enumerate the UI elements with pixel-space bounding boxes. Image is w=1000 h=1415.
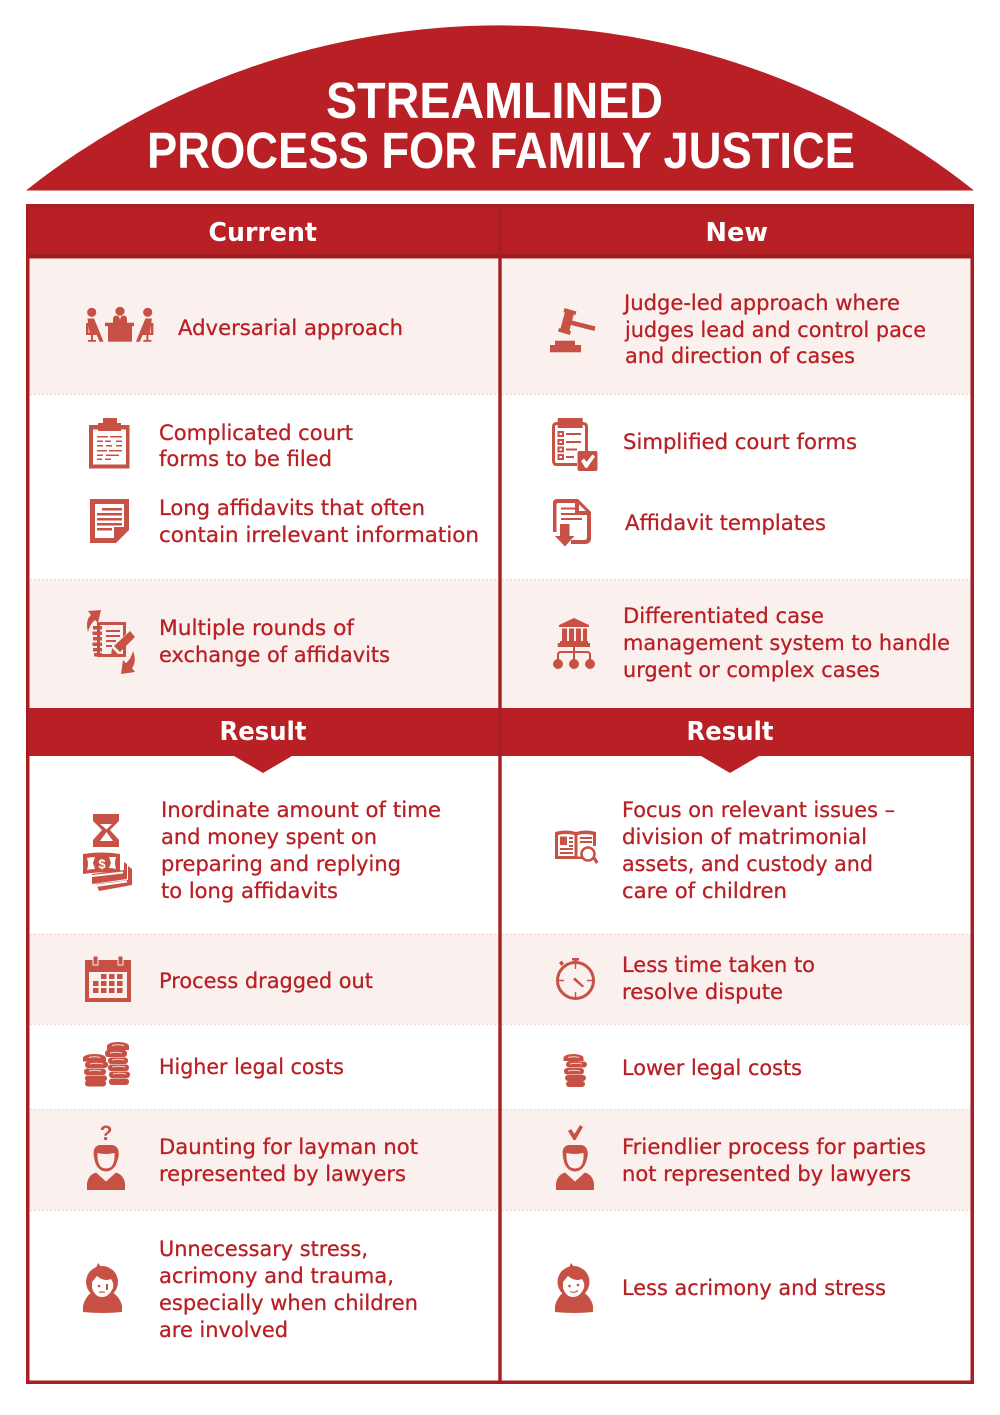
text — [161, 798, 441, 904]
left result: time and money — [83, 798, 441, 904]
text: Process dragged out — [159, 969, 373, 994]
text: preparing and replying — [161, 852, 401, 877]
right column: simplified forms — [552, 418, 857, 471]
icon: coin stack — [564, 1054, 587, 1087]
text — [159, 496, 479, 548]
text: resolve dispute — [622, 980, 783, 1005]
text: are involved — [159, 1318, 288, 1343]
icon: person with question mark: ? — [100, 1122, 112, 1145]
text: Less time taken to — [622, 953, 815, 978]
text: Friendlier process for parties — [622, 1135, 926, 1160]
text: Long affidavits that often — [159, 496, 425, 521]
text — [622, 291, 926, 369]
title: STREAMLINED — [326, 72, 663, 129]
icon: stopwatch — [558, 958, 594, 998]
text: Less acrimony and stress — [622, 1276, 886, 1301]
text: to long affidavits — [161, 879, 338, 904]
icon: court parties — [86, 307, 153, 342]
text — [622, 953, 815, 1005]
text: and direction of cases — [625, 344, 855, 369]
text: Complicated court — [159, 421, 353, 446]
text: Unnecessary stress, — [159, 1237, 368, 1262]
title — [147, 72, 855, 179]
text: and money spent on — [161, 825, 377, 850]
result band: left: Result — [220, 717, 306, 747]
icon: person with tick — [556, 1125, 594, 1190]
text — [159, 616, 390, 668]
text — [159, 1237, 418, 1343]
text — [622, 1135, 926, 1187]
right column: judge-led approach — [550, 291, 926, 369]
text: urgent or complex cases — [623, 658, 880, 683]
text: care of children — [622, 879, 787, 904]
text: Differentiated case — [623, 604, 824, 629]
text — [159, 421, 353, 472]
title banner — [26, 25, 974, 190]
right result: less time — [558, 953, 815, 1005]
header band: current and new: New — [706, 218, 768, 248]
icon: calendar — [85, 956, 131, 1002]
header band: current and new: Current — [208, 218, 317, 248]
right column: affidavit templates — [553, 499, 826, 546]
left column: multiple rounds — [87, 610, 390, 674]
left column: complicated forms — [89, 418, 353, 472]
text: acrimony and trauma, — [159, 1264, 394, 1289]
comparison table — [28, 206, 972, 1382]
text: Lower legal costs — [622, 1056, 802, 1081]
text: exchange of affidavits — [159, 643, 390, 668]
left result: daunting for layman — [87, 1122, 418, 1190]
right result: less acrimony — [555, 1263, 886, 1313]
right result: focus on relevant issues — [555, 798, 895, 904]
text — [623, 604, 950, 683]
icon: smiling child — [555, 1263, 593, 1313]
icon: book with magnifier — [555, 830, 598, 864]
text: assets, and custody and — [622, 852, 873, 877]
icon: institution with branches — [553, 618, 595, 669]
icon: checklist — [552, 418, 598, 471]
row backgrounds — [29, 259, 971, 1210]
result band: right — [500, 708, 972, 773]
text: Simplified court forms — [623, 430, 857, 455]
text: not represented by lawyers — [622, 1162, 911, 1187]
table frame — [28, 206, 972, 1382]
text — [622, 798, 895, 904]
icon: crying child — [83, 1263, 122, 1313]
icon: person with question mark — [87, 1122, 125, 1190]
text: Higher legal costs — [159, 1055, 344, 1080]
title: PROCESS FOR FAMILY JUSTICE — [147, 122, 855, 179]
text: especially when children — [159, 1291, 418, 1316]
text: forms to be filed — [159, 447, 332, 472]
result band: right: Result — [686, 717, 774, 747]
text: contain irrelevant information — [159, 523, 479, 548]
left column: long affidavits — [90, 496, 479, 548]
right column: differentiated case management — [553, 604, 950, 683]
icon: notebook with pen and arrows — [87, 610, 135, 674]
text: Multiple rounds of — [159, 616, 354, 641]
left result: process dragged out — [85, 956, 373, 1002]
text: Focus on relevant issues – — [622, 798, 895, 823]
text — [159, 1135, 418, 1187]
icon: hourglass and banknotes — [83, 814, 132, 891]
text: Adversarial approach — [178, 316, 403, 341]
text: division of matrimonial — [622, 825, 867, 850]
icon: coin stacks — [83, 1042, 130, 1086]
text: management system to handle — [623, 631, 950, 656]
text: Inordinate amount of time — [161, 798, 441, 823]
right result: friendlier process — [556, 1125, 926, 1190]
right result: lower legal costs — [564, 1054, 802, 1087]
icon: file download — [553, 499, 591, 546]
icon: document — [90, 499, 129, 543]
left result: stress and trauma — [83, 1237, 418, 1343]
left result: higher legal costs — [83, 1042, 344, 1086]
text: represented by lawyers — [159, 1162, 406, 1187]
left column: adversarial approach — [86, 307, 403, 342]
text: Judge-led approach where — [622, 291, 900, 316]
header band: current and new — [28, 206, 972, 258]
text: judges lead and control pace — [624, 318, 926, 343]
icon: hourglass and banknotes: $ — [98, 856, 106, 872]
icon: gavel — [550, 308, 596, 352]
result band: left — [28, 708, 500, 773]
text: Affidavit templates — [625, 511, 826, 536]
text: Daunting for layman not — [159, 1135, 418, 1160]
icon: clipboard form — [89, 418, 130, 468]
